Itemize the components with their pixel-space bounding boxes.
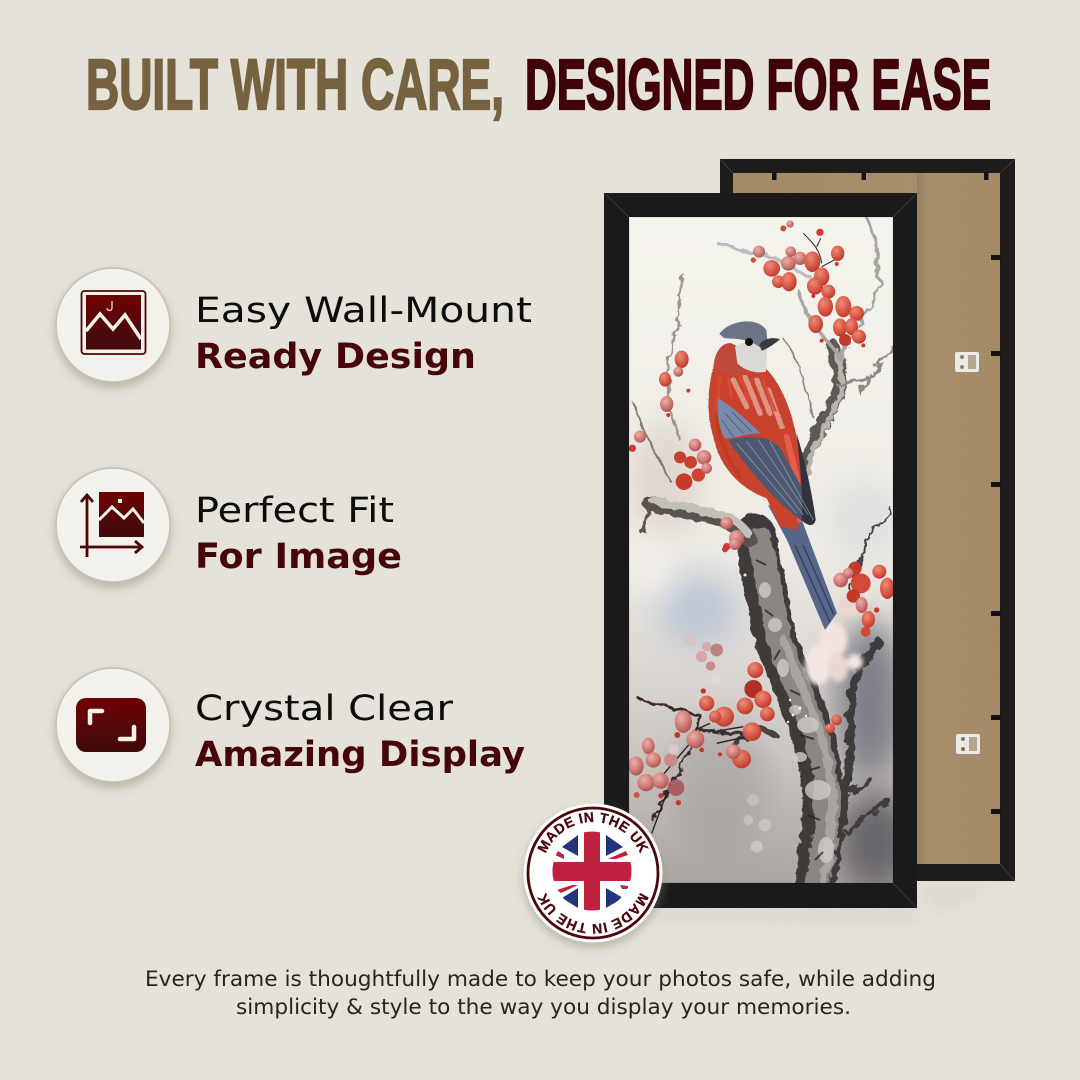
left berries (629, 351, 744, 550)
watercolor wash (629, 217, 913, 890)
wall hanger top (955, 352, 979, 372)
feature text (195, 689, 525, 775)
feature text: Amazing Display (195, 735, 525, 775)
footer text (145, 967, 936, 1019)
feature text: Ready Design (195, 337, 476, 377)
badge: made in the uk (519, 804, 668, 952)
pale blossoms (805, 593, 865, 685)
icon: framed mountain picture with hook (56, 268, 170, 382)
title: BUILT WITH CARE, (86, 46, 504, 125)
icon: picture with dimension arrows (56, 468, 170, 582)
icon: rounded screen with corner marks (56, 668, 170, 782)
bark texture (744, 560, 834, 863)
circular text: MADE IN THE UK (537, 892, 649, 934)
front framed artwork (604, 193, 922, 922)
mat edge shadow (629, 217, 893, 883)
back of frame (720, 159, 1015, 915)
painting: bird on a berry branch (628, 217, 913, 892)
head (713, 343, 766, 375)
circular text (537, 812, 649, 934)
footer text: simplicity & style to the way you display your memories. (236, 995, 851, 1019)
dark primary feathers (728, 437, 816, 524)
top berries (751, 220, 866, 347)
black frame (604, 193, 917, 908)
feature: perfect fit (56, 468, 402, 582)
bird (708, 321, 837, 630)
red breast (708, 363, 803, 530)
feature text: Perfect Fit (195, 491, 394, 531)
lower and right berries (628, 538, 895, 853)
union flag (552, 831, 632, 911)
circular text: MADE IN THE UK (537, 812, 649, 854)
wall hanger bottom (956, 734, 980, 754)
feature text: Crystal Clear (195, 689, 454, 729)
retaining clips (772, 172, 1001, 814)
feature: easy wall-mount (56, 268, 532, 382)
blue upper wing (718, 398, 761, 439)
tree branches (632, 217, 892, 892)
black outer frame, back view (720, 159, 1015, 881)
footer text: Every frame is thoughtfully made to keep your photos safe, while adding (145, 967, 936, 991)
feature text: Easy Wall-Mount (195, 291, 532, 331)
feature text: For Image (195, 537, 402, 577)
feature: crystal clear (56, 668, 525, 782)
feature text (195, 291, 532, 377)
tail (768, 505, 837, 630)
cardboard backing (733, 173, 1000, 864)
feature text (195, 491, 402, 577)
mottled breast feathers (717, 377, 800, 520)
